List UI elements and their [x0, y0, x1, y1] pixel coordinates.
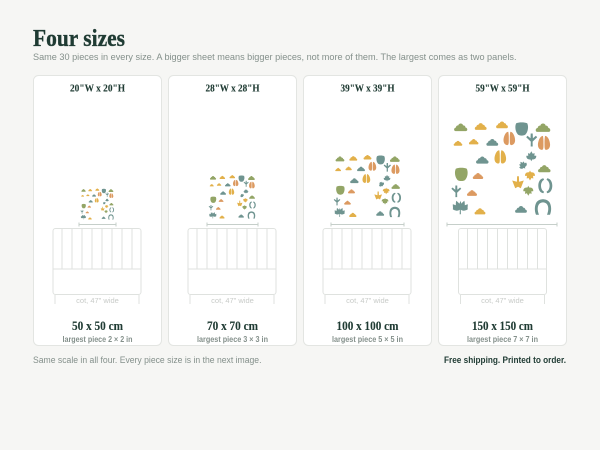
panel: 70 x 70 cm [168, 76, 296, 346]
wall art preview [451, 121, 552, 215]
largest piece: largest piece 5 × 5 in [332, 335, 403, 344]
width ruler [331, 222, 404, 226]
width ruler [447, 222, 557, 226]
size: 70 x 70 cm [207, 319, 259, 333]
cot caption: cot, 47" wide [481, 296, 524, 305]
largest piece: largest piece 2 × 2 in [62, 335, 133, 344]
heading: 28 inch: 28"W x 28"H [206, 82, 260, 94]
wall art preview [80, 188, 114, 220]
panel: 150 x 150 cm [438, 76, 566, 346]
cot [323, 228, 411, 304]
largest piece: largest piece 7 × 7 in [467, 335, 538, 344]
cot [188, 228, 276, 304]
footnote: Same scale in all four. Every piece size is in the next image. [33, 355, 262, 365]
size: 100 x 100 cm [336, 319, 399, 333]
width ruler [207, 222, 258, 226]
shipping note: Free shipping. Printed to order. [444, 355, 566, 365]
heading: 20 inch: 20"W x 20"H [70, 82, 125, 94]
size: 50 x 50 cm [72, 319, 124, 333]
panel: 50 x 50 cm [34, 76, 162, 346]
cot caption: cot, 47" wide [211, 296, 254, 305]
title: Four sizes [33, 26, 125, 52]
cot caption: cot, 47" wide [346, 296, 389, 305]
cot [458, 228, 546, 304]
cot [53, 228, 141, 304]
cot caption: cot, 47" wide [76, 296, 119, 305]
heading: 59 inch: 59"W x 59"H [476, 82, 530, 94]
wall art preview [209, 175, 256, 219]
wall art preview [334, 155, 401, 217]
subtitle: Same 30 pieces in every size. A bigger sheet means bigger pieces, not more of them. The largest comes as two panels. [33, 52, 516, 62]
width ruler [79, 222, 116, 226]
panel: 100 x 100 cm [304, 76, 432, 346]
size: 150 x 150 cm [472, 319, 534, 333]
heading: 39 inch: 39"W x 39"H [340, 82, 395, 94]
largest piece: largest piece 3 × 3 in [197, 335, 268, 344]
